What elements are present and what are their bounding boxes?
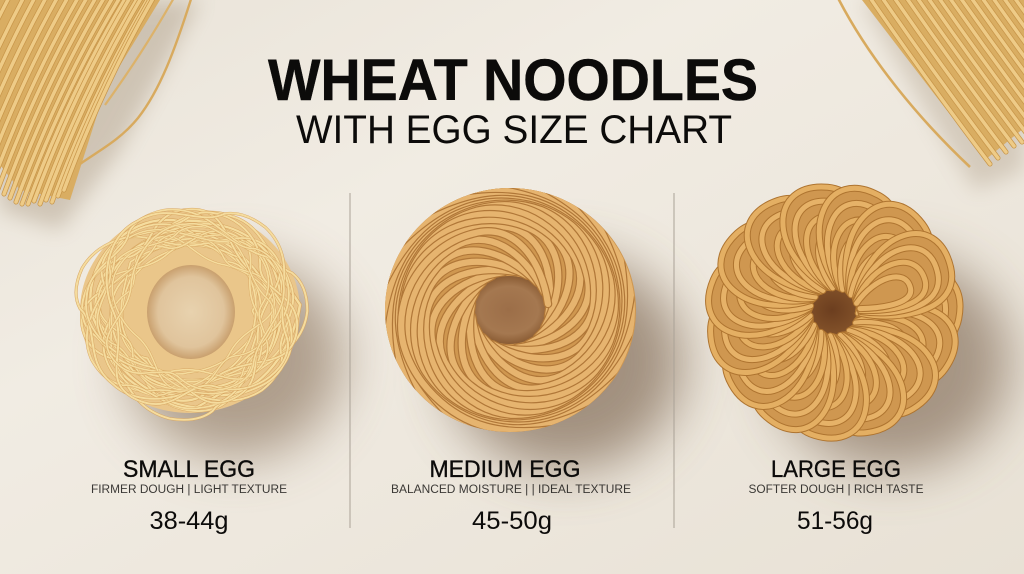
label: small egg (91, 456, 287, 535)
large egg noodle nest (698, 176, 969, 447)
divider right (674, 193, 675, 528)
divider left (350, 193, 351, 528)
label: medium egg (391, 456, 631, 535)
noodle bundle: top right (838, 0, 1024, 167)
small egg name: SMALL EGG (123, 456, 255, 483)
large egg name: LARGE EGG (771, 456, 901, 483)
large egg weight: 51-56g (797, 507, 873, 535)
subtitle: WITH EGG SIZE CHART (296, 108, 732, 152)
medium egg description: BALANCED MOISTURE | | IDEAL TEXTURE (391, 484, 631, 496)
small egg weight: 38-44g (150, 507, 228, 535)
small egg noodle nest (39, 164, 348, 453)
label: large egg (748, 456, 924, 535)
medium egg noodle nest (385, 188, 636, 432)
large egg description: SOFTER DOUGH | RICH TASTE (748, 484, 924, 496)
medium egg weight: 45-50g (472, 507, 552, 535)
medium egg name: MEDIUM EGG (430, 456, 580, 483)
small egg description: FIRMER DOUGH | LIGHT TEXTURE (91, 484, 287, 496)
title: WHEAT NOODLES (268, 48, 758, 113)
noodle bundle: top left (0, 0, 192, 204)
